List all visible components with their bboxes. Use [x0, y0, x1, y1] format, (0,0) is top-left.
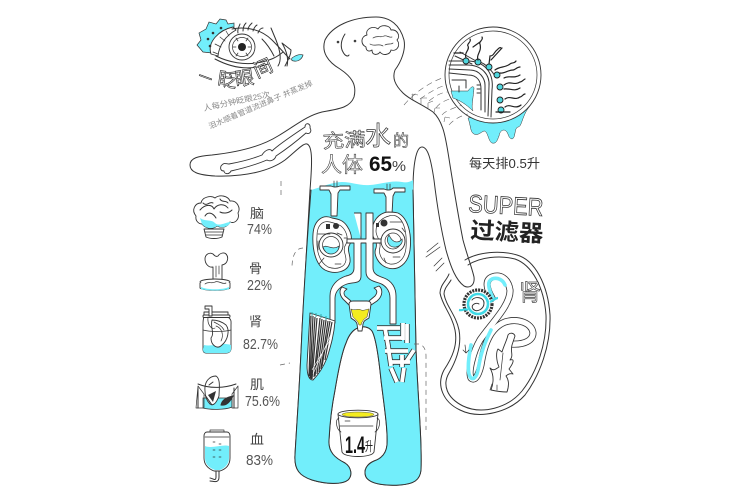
bone vessel network — [377, 323, 414, 382]
nephron lens drips — [468, 106, 530, 143]
icon: eye and tear gland — [197, 19, 303, 68]
heading: 一眨眼间: 间 — [250, 55, 276, 83]
icon: arm bone — [221, 124, 311, 174]
label: muscle — [245, 377, 280, 410]
label: kidney: 肾 — [249, 314, 262, 329]
title: 充满水的 人体 65%: 65 — [369, 153, 392, 176]
vessels and ureters — [330, 213, 396, 324]
label: muscle: 肌 — [250, 377, 264, 392]
muscle — [307, 312, 335, 380]
nephron lens circle — [445, 27, 541, 123]
dashed connectors — [280, 180, 426, 430]
icon: muscle 75.6% — [196, 376, 238, 409]
text: 每天排0.5升: 每天排0.5升 — [469, 156, 540, 171]
label: brain — [247, 206, 272, 238]
title: 充满水的 人体 65%: 人体 — [321, 154, 363, 177]
bucket of 1.4 litres — [336, 410, 380, 459]
title: 充满水的 人体 65%: 充满 — [322, 129, 366, 153]
water fill inside the body — [295, 180, 421, 485]
text: tears path: 泪水顺着管道流进鼻子 并蒸发掉 — [207, 78, 314, 131]
title: 充满水的 人体 65% — [321, 121, 409, 177]
text: blink rate: 人每分钟眨眼25次 — [202, 89, 271, 113]
heading: 过滤器: 过滤器 — [470, 217, 544, 247]
label: brain: 74% — [247, 221, 272, 238]
label: blood — [246, 432, 273, 469]
label: kidney: 82.7% — [243, 336, 278, 353]
nephron tube — [470, 276, 533, 379]
icon: bone 22% — [200, 253, 230, 290]
label: bone: 22% — [247, 277, 272, 294]
kidney cross-section — [440, 252, 550, 414]
bladder with yellow urine — [349, 301, 371, 331]
bucket of 1.4 litres: 升 — [365, 439, 373, 454]
kidney organ right — [372, 184, 410, 269]
label: bone: 骨 — [249, 261, 262, 276]
title: 充满水的 人体 65%: 水 — [365, 121, 391, 151]
icon: kidney jar 82.7% — [203, 306, 231, 353]
heading: SUPER: SUPER — [468, 190, 544, 222]
label: blood: 83% — [246, 452, 273, 469]
title: 充满水的 人体 65%: 的 — [393, 132, 409, 150]
label: brain: 脑 — [250, 206, 264, 221]
label: bone — [247, 261, 272, 294]
heading: 一眨眼间: 一 — [196, 68, 215, 88]
kidney organ left — [313, 181, 351, 272]
human body outline — [190, 17, 474, 485]
hand lines — [426, 243, 444, 271]
title: 充满水的 人体 65%: % — [392, 158, 406, 175]
kidney cross-section: 肾 — [519, 279, 541, 305]
icon: brain in head — [362, 26, 399, 54]
glomerulus — [459, 290, 498, 318]
heading: 一眨眼间: 眨 — [216, 68, 238, 93]
bucket of 1.4 litres: 1.4 — [345, 432, 365, 459]
label: blood: 血 — [250, 432, 264, 447]
body contour over water — [295, 190, 421, 485]
label: muscle: 75.6% — [245, 393, 280, 410]
heading: 一眨眼间: 眼 — [234, 68, 256, 91]
heading: 一眨眼间 — [196, 55, 276, 93]
arrows into lens — [404, 77, 468, 125]
label: kidney — [243, 314, 278, 353]
face — [337, 34, 356, 56]
icon: blood bag 83% — [204, 430, 230, 482]
icon: brain 74% — [194, 196, 239, 238]
